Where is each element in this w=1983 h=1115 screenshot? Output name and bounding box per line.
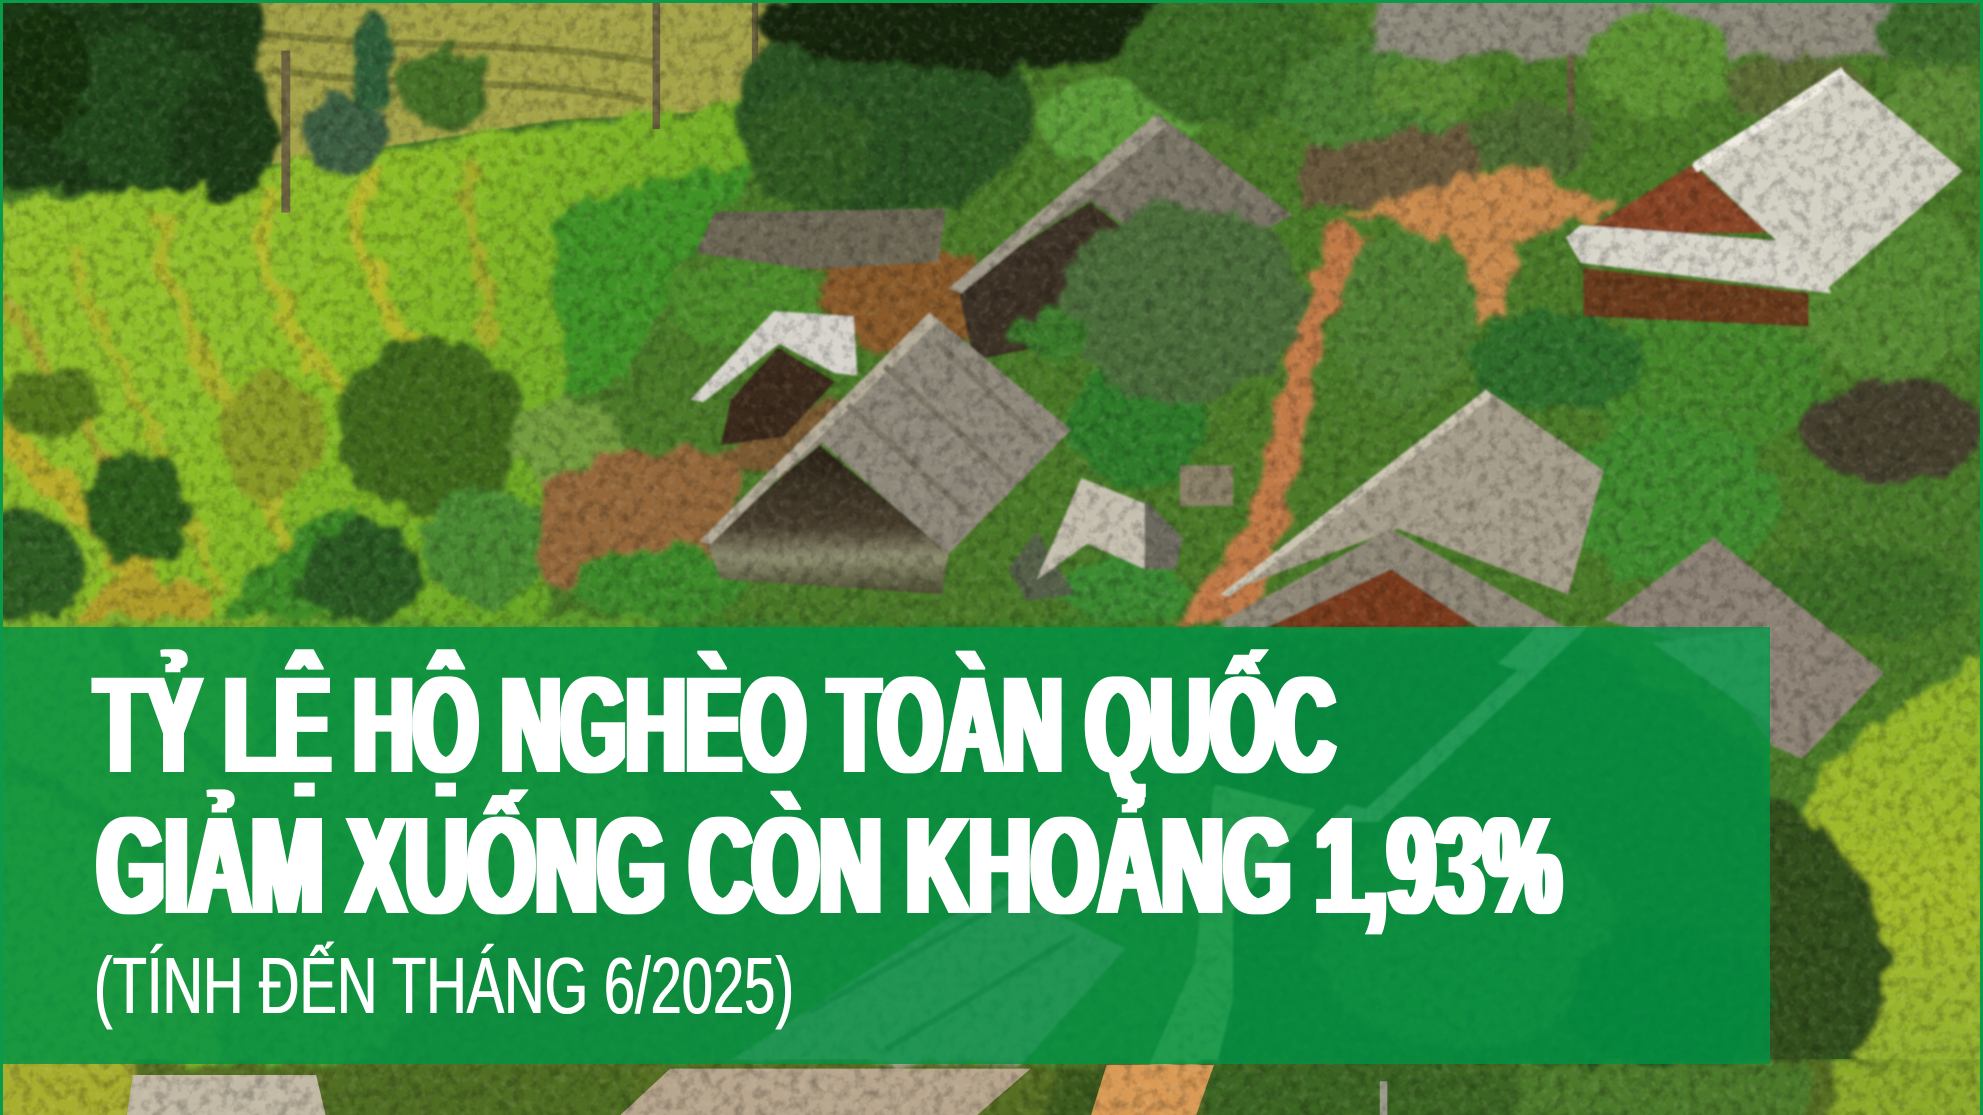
date note: (TÍNH ĐẾN THÁNG 6/2025) bbox=[94, 941, 794, 1030]
yellow rice field at the top bbox=[234, 0, 784, 164]
house: lower right bbox=[1604, 537, 1884, 759]
house: top right, white roof bbox=[1566, 67, 1963, 326]
houses in the bottom strip bbox=[126, 1065, 1387, 1115]
forest at top left bbox=[0, 0, 488, 196]
house: large central bbox=[699, 312, 1071, 594]
scene behind the banner bbox=[0, 620, 1771, 1075]
bottom strip of the photo bbox=[0, 1062, 1983, 1115]
house: tiny white gable bbox=[1008, 478, 1182, 601]
mid-slope bushes and dirt ground bbox=[300, 253, 974, 629]
house: low roof bbox=[696, 209, 946, 269]
banner panel bbox=[3, 627, 1770, 1064]
title banner bbox=[3, 627, 1770, 1064]
house: small white roof bbox=[691, 311, 857, 445]
right side rice field and tree bbox=[1764, 658, 1983, 1115]
trees at the centre top and right side bbox=[740, 0, 1983, 639]
house: lower centre-right bbox=[1208, 390, 1604, 629]
house: upper centre bbox=[949, 114, 1292, 360]
terraced hillside bbox=[0, 101, 761, 632]
house roofs bbox=[691, 67, 1963, 759]
tree overlapping the upper house bbox=[1012, 205, 1303, 402]
utility poles bbox=[286, 0, 1571, 212]
dirt path bbox=[1176, 171, 1619, 626]
roofs and path under the banner bbox=[708, 627, 1769, 1075]
